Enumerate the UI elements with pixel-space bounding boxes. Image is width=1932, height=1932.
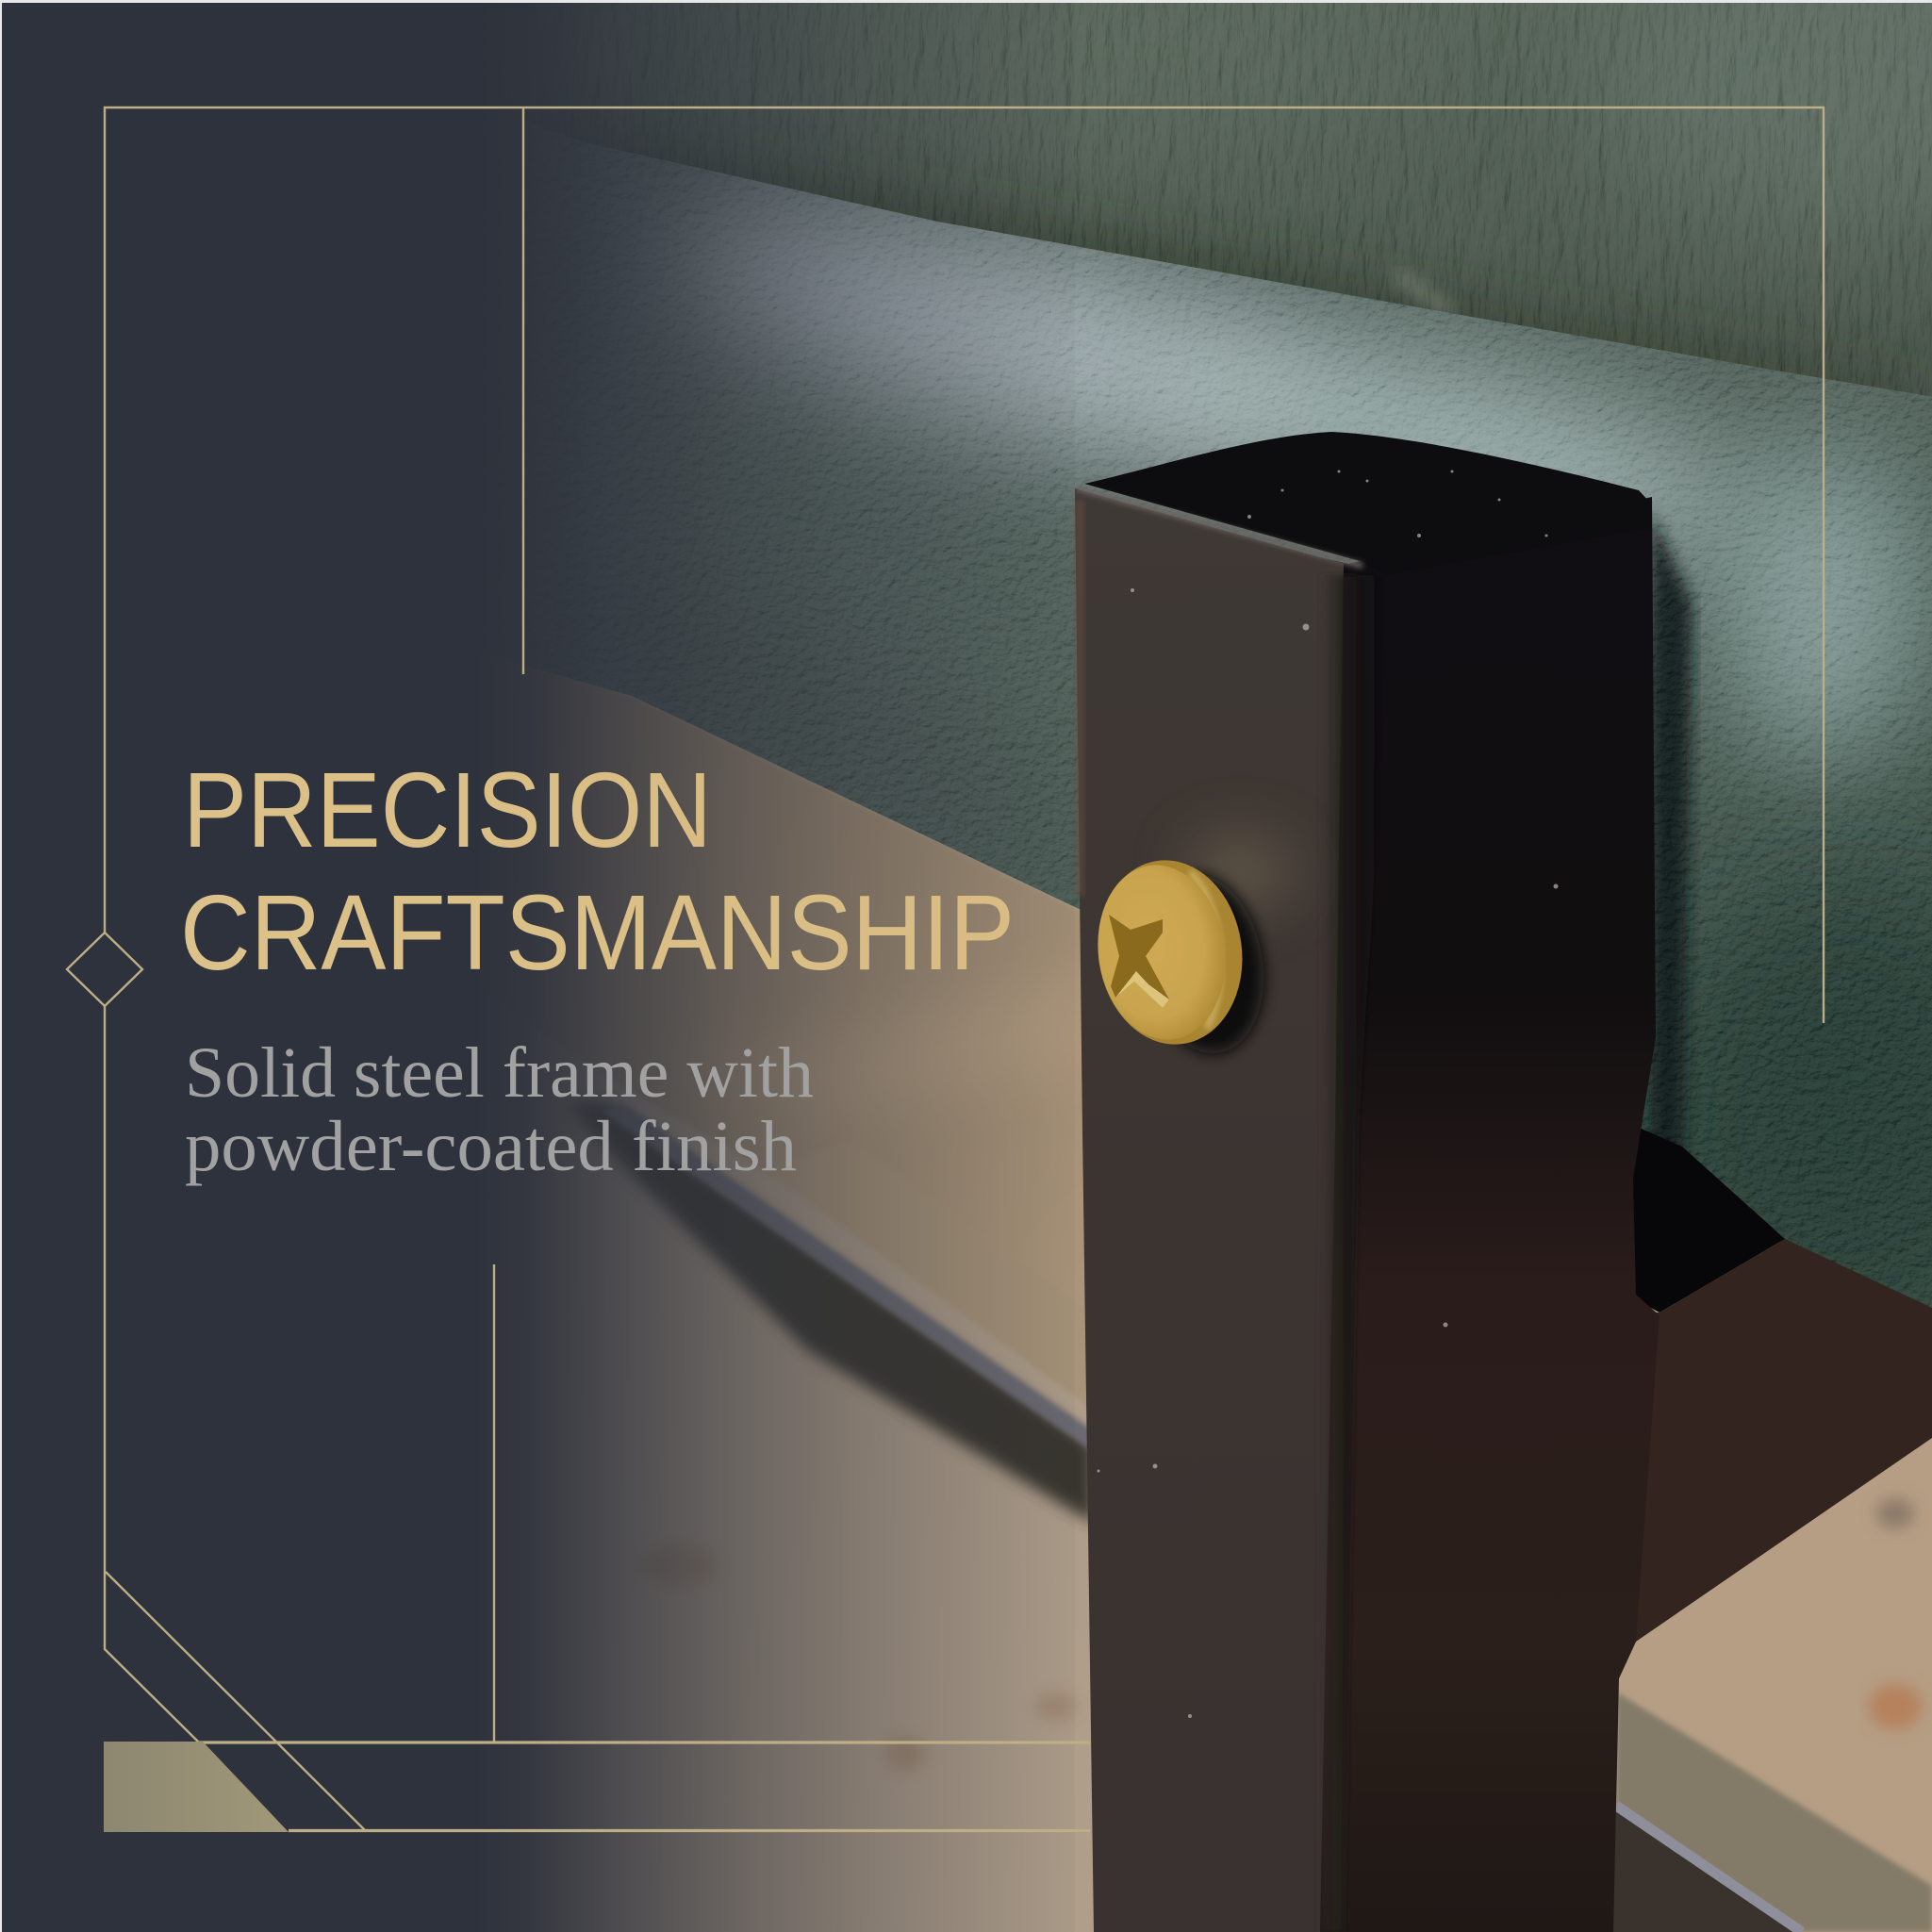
photo: plank lighter front edge	[798, 1189, 1086, 1405]
photo: concrete floor	[543, 162, 1932, 1932]
title line 1: PRECISION	[183, 751, 712, 869]
photo: plank grain	[901, 1005, 1065, 1065]
photo: leg specks	[1098, 470, 1558, 1718]
photo: dark steel rail	[566, 1101, 1094, 1524]
screw rim highlight	[1190, 872, 1220, 1028]
gold frame linework	[105, 107, 1824, 1831]
photo: upper leather cushion	[541, 3, 1932, 397]
screw head	[1087, 857, 1236, 1048]
photo: right floor stains	[1869, 1498, 1922, 1729]
photo: lower right rail	[1613, 1808, 1796, 1932]
photo: right floor tile	[1619, 1433, 1932, 1932]
photo: wooden plank behind the frame	[651, 711, 1084, 1307]
photo: bench leg top cap	[1084, 432, 1652, 575]
subtitle	[185, 1033, 814, 1186]
subtitle line 2: powder-coated finish	[185, 1107, 797, 1186]
screw cross recess	[1109, 915, 1169, 1008]
diagonal accent line	[106, 1572, 366, 1831]
bottom band lower rule	[289, 1829, 1090, 1832]
photo: floor stains	[671, 1556, 1077, 1771]
gold corner plate	[104, 1742, 289, 1832]
outer frame with chamfered corner	[105, 107, 1824, 1742]
icon: brass screw	[1086, 850, 1254, 1054]
subtitle line 1: Solid steel frame with	[185, 1033, 814, 1113]
photo: frame cross bar	[1593, 1239, 1932, 1678]
photo: rail highlight	[603, 1103, 1094, 1452]
screw rim	[1086, 850, 1254, 1054]
background photo: steel bench leg against green leather	[525, 3, 1932, 1932]
photo: dark shadow under the cushion	[1627, 1122, 1785, 1313]
bottom band upper rule	[198, 1741, 1090, 1744]
photo: glow above the screw	[1188, 834, 1292, 910]
diamond ornament	[67, 933, 142, 1006]
title	[180, 751, 1015, 992]
photo: bench leg corner band	[1306, 575, 1386, 1932]
photo: lower leather cushion	[471, 104, 1932, 1339]
photo: bench leg left edge warm reflection	[1075, 500, 1084, 896]
photo: screw shadow	[1131, 865, 1278, 1063]
photo: bench leg bevel highlight	[1077, 488, 1362, 566]
inner bottom vertical rule	[493, 1264, 495, 1742]
navy gradient panel over the photo	[2, 3, 1075, 1932]
title line 2: CRAFTSMANSHIP	[180, 873, 1015, 992]
inner top vertical rule	[522, 107, 524, 674]
screw recess highlight	[1115, 971, 1169, 1008]
photo: lower right ledge	[1616, 1693, 1932, 1932]
photo: bench leg right face	[1315, 497, 1660, 1932]
photo: bench leg left face	[1075, 488, 1344, 1932]
photo: lower right rail highlight	[1616, 1806, 1802, 1932]
